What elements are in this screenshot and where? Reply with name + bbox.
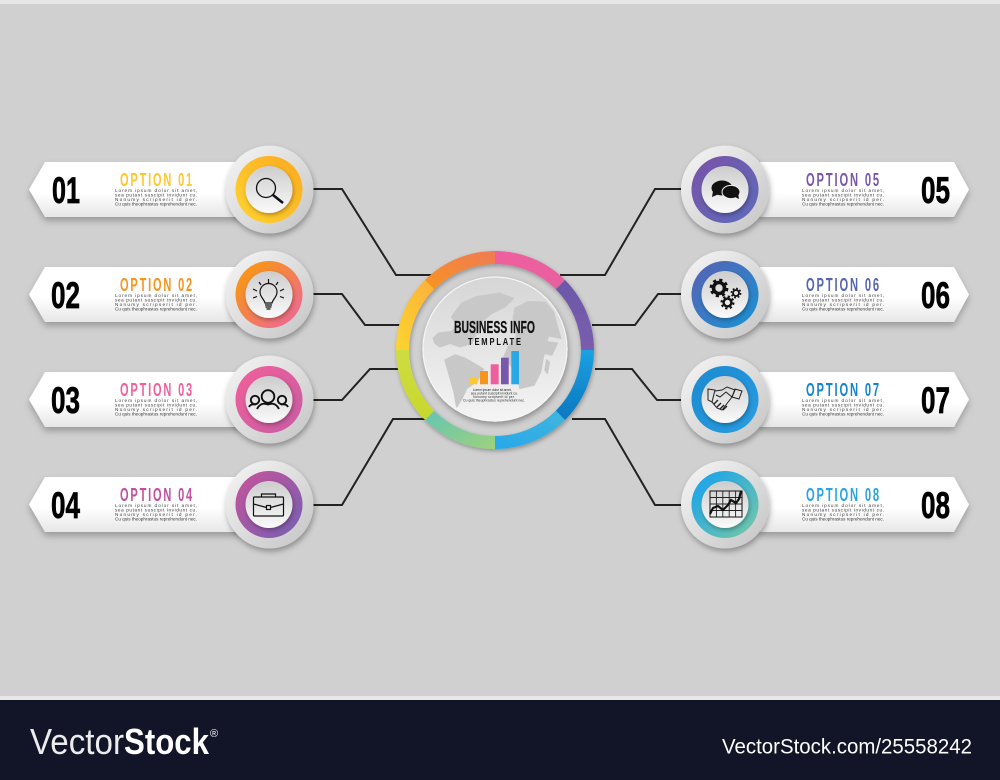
text 01: [115, 188, 197, 206]
badge 06: [681, 250, 769, 338]
banner 01: [29, 162, 240, 217]
heading 05: OPTION 05: [806, 170, 881, 190]
badge 08: [681, 460, 769, 548]
heading 06: OPTION 06: [806, 275, 881, 295]
text 08: Lorem ipsum dolor sit amet,: [802, 503, 884, 508]
hub caption: Cu quis theophrastus reprehendunt nec.: [463, 398, 525, 402]
icon: gears: [711, 280, 741, 308]
logo: Stock: [124, 721, 210, 762]
hub white disc: [423, 277, 567, 421]
number 01: 01: [52, 170, 80, 211]
icon: speech bubbles: [712, 180, 740, 199]
text 02: Cu quis theophrastus reprehendunt nec.: [115, 306, 197, 312]
badge 05: [681, 146, 769, 234]
text 03: Lorem ipsum dolor sit amet,: [115, 398, 197, 403]
panel: option 05: [681, 146, 969, 234]
logo: ®: [210, 728, 218, 740]
panel: option 06: [681, 250, 969, 338]
text 05: sea putant suscipit invidunt cu.: [802, 192, 884, 198]
heading 02: OPTION 02: [120, 275, 194, 295]
heading 03: OPTION 03: [120, 380, 194, 400]
footer bar: [0, 700, 1000, 780]
panel: option 01: [29, 146, 314, 234]
text 05: Cu quis theophrastus reprehendunt nec.: [802, 202, 884, 206]
text 02: Nonumy scripserit id per.: [115, 302, 197, 307]
text 05: Nonumy scripserit id per.: [802, 197, 884, 202]
text 06: [802, 293, 884, 312]
hub colored ring: [396, 251, 594, 449]
text 06: Lorem ipsum dolor sit amet,: [802, 293, 884, 298]
text 06: Cu quis theophrastus reprehendunt nec.: [802, 306, 884, 312]
hub title: BUSINESS INFO: [454, 317, 535, 337]
badge 07: [681, 356, 769, 444]
text 04: Nonumy scripserit id per.: [115, 512, 197, 517]
text 03: Cu quis theophrastus reprehendunt nec.: [115, 412, 197, 416]
panel: option 04: [29, 460, 314, 548]
banner 04: [29, 477, 240, 532]
text 04: Cu quis theophrastus reprehendunt nec.: [115, 516, 197, 522]
number 07: 07: [921, 380, 950, 421]
number 03: 03: [51, 380, 80, 421]
text 05: Lorem ipsum dolor sit amet,: [802, 188, 884, 193]
text 08: Nonumy scripserit id per.: [802, 512, 884, 517]
text 07: Lorem ipsum dolor sit amet,: [802, 398, 884, 403]
text 01: Nonumy scripserit id per.: [115, 197, 197, 202]
connector lines: [312, 189, 684, 505]
icon: line chart grid: [710, 491, 742, 517]
text 01: sea putant suscipit invidunt cu.: [115, 192, 197, 198]
icon: magnifier: [256, 178, 283, 203]
text 08: [802, 503, 884, 522]
text 06: Nonumy scripserit id per.: [802, 302, 884, 307]
heading 01: OPTION 01: [120, 170, 194, 190]
text 08: sea putant suscipit invidunt cu.: [802, 508, 884, 512]
hub bar chart: [470, 351, 519, 384]
text 02: Lorem ipsum dolor sit amet,: [115, 293, 197, 298]
text 05: [802, 188, 884, 206]
icon: briefcase: [254, 494, 284, 516]
image id: VectorStock.com/25558242: [722, 736, 972, 758]
text 01: Lorem ipsum dolor sit amet,: [115, 188, 197, 193]
number 08: 08: [921, 485, 950, 526]
text 02: [115, 293, 197, 312]
number 02: 02: [51, 275, 80, 316]
text 07: [802, 398, 884, 416]
hub caption: sea putant suscipit invidunt cu.: [471, 392, 518, 396]
banner 07: [760, 372, 969, 427]
text 01: Cu quis theophrastus reprehendunt nec.: [115, 202, 197, 206]
number 04: 04: [51, 485, 80, 526]
logo: Vector: [30, 721, 124, 762]
banner 05: [760, 162, 969, 217]
text 08: Cu quis theophrastus reprehendunt nec.: [802, 516, 884, 522]
heading 07: OPTION 07: [806, 380, 881, 400]
panel: option 03: [29, 356, 314, 444]
text 04: sea putant suscipit invidunt cu.: [115, 508, 197, 512]
panel: option 08: [681, 460, 969, 548]
logo: [30, 721, 218, 762]
icon: people: [249, 390, 288, 409]
text 03: sea putant suscipit invidunt cu.: [115, 402, 197, 408]
banner 02: [29, 267, 240, 322]
top edge strip: [0, 0, 1000, 4]
number 05: 05: [921, 170, 950, 211]
world map: [433, 293, 561, 407]
center hub: [396, 251, 594, 449]
banner 06: [760, 267, 969, 322]
bottom edge strip: [0, 696, 1000, 700]
banner 08: [760, 477, 969, 532]
number 06: 06: [921, 275, 950, 316]
icon: handshake: [708, 387, 742, 410]
text 07: sea putant suscipit invidunt cu.: [802, 402, 884, 408]
badge 04: [226, 460, 314, 548]
text 04: Lorem ipsum dolor sit amet,: [115, 503, 197, 508]
panel: option 02: [29, 250, 314, 338]
hub caption: [463, 388, 525, 402]
text 04: [115, 503, 197, 522]
text 07: Cu quis theophrastus reprehendunt nec.: [802, 412, 884, 416]
panel: option 07: [681, 356, 969, 444]
text 03: Nonumy scripserit id per.: [115, 407, 197, 412]
banner 03: [29, 372, 240, 427]
heading 08: OPTION 08: [806, 485, 881, 505]
text 02: sea putant suscipit invidunt cu.: [115, 298, 197, 302]
badge 02: [226, 250, 314, 338]
heading 04: OPTION 04: [120, 485, 194, 505]
text 03: [115, 398, 197, 416]
badge 01: [226, 146, 314, 234]
hub subtitle: TEMPLATE: [468, 336, 521, 347]
badge 03: [226, 356, 314, 444]
text 07: Nonumy scripserit id per.: [802, 407, 884, 412]
text 06: sea putant suscipit invidunt cu.: [802, 298, 884, 302]
icon: light bulb: [253, 279, 284, 309]
hub caption: Nonumy scripserit id per.: [473, 395, 515, 399]
hub caption: Lorem ipsum dolor sit amet,: [473, 388, 512, 392]
